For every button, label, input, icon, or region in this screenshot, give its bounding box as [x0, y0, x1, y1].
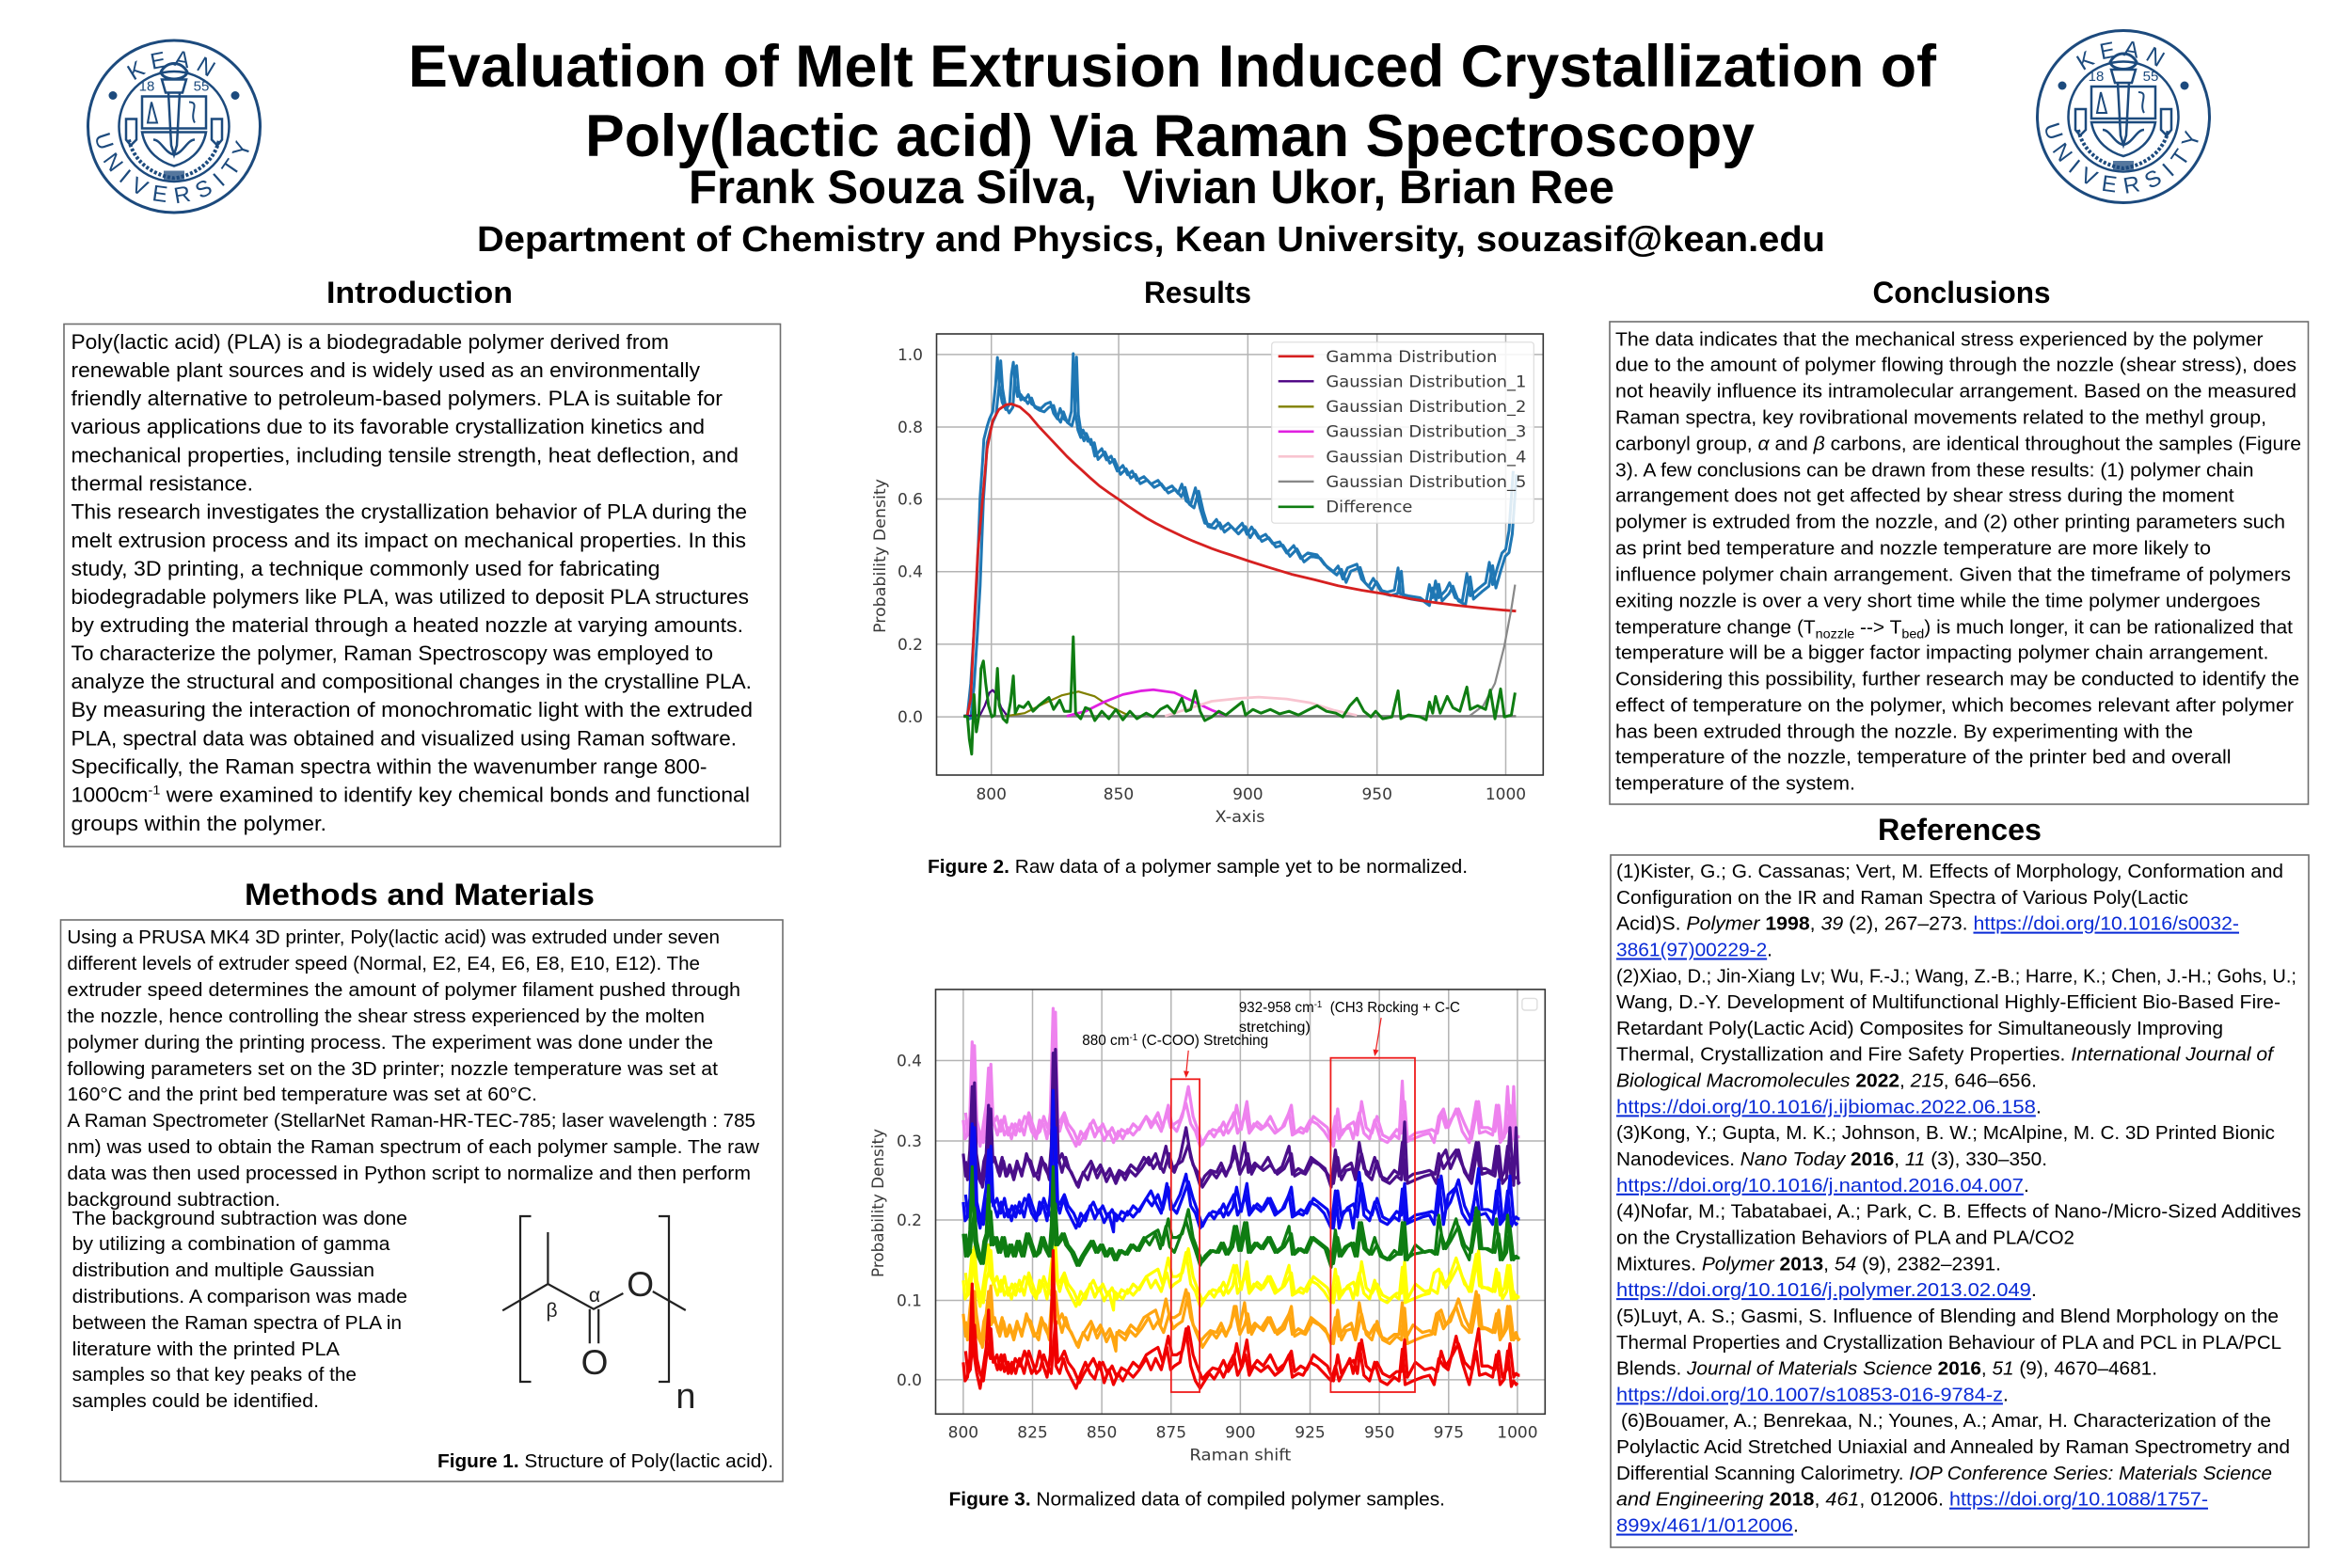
introduction text	[72, 330, 753, 835]
introduction text: friendly alternative to petroleum-based polymers. PLA is suitable for	[72, 387, 723, 410]
axis tick labels and titles: 900	[1225, 1424, 1256, 1443]
conclusions text: arrangement does not get affected by shear stress during the moment	[1615, 485, 2234, 506]
caption: figure 3: Figure 3. Normalized data of compiled polymer samples.	[948, 1490, 1445, 1511]
axis tick labels and titles: 0.8	[898, 419, 923, 437]
methods text: background subtraction.	[67, 1190, 280, 1211]
methods text: nm) was used to obtain the Raman spectrum of each polymer sample. The raw	[67, 1137, 759, 1158]
methods text beside the structure: samples could be identified.	[72, 1391, 319, 1412]
plot frame	[935, 990, 1545, 1414]
reference list: (6)Bouamer, A.; Benrekaa, N.; Younes, A.; Amar, H. Characterization of the	[1621, 1411, 2271, 1432]
conclusions text: as print bed temperature and nozzle temperature are more likely to	[1615, 538, 2211, 559]
chemical structure of PLA: n	[675, 1377, 696, 1417]
reference list: https://doi.org/10.1007/s10853-016-9784-z .	[1616, 1385, 2009, 1405]
chart: figure 3 normalized data	[869, 990, 1545, 1465]
panel: introduction	[64, 324, 781, 847]
conclusions text: due to the amount of polymer flowing through the nozzle (shear stress), does	[1615, 356, 2296, 376]
annotation: 932-958 cm-1 region	[1239, 1000, 1460, 1036]
reference list: Differential Scanning Calorimetry. IOP Conference Series: Materials Science	[1616, 1464, 2272, 1484]
axis tick labels and titles: 0.2	[898, 636, 923, 655]
reference list: Acid)S. Polymer 1998, 39 (2), 267–273. https://doi.org/10.1016/s0032-	[1616, 914, 2239, 935]
red highlight boxes and arrows	[1171, 1018, 1415, 1392]
plot area with spectra	[936, 990, 1545, 1414]
introduction text: groups within the polymer.	[72, 812, 326, 835]
introduction text: Specifically, the Raman spectra within the wavenumber range 800-	[72, 754, 707, 779]
introduction text: This research investigates the crystallization behavior of PLA during the	[72, 500, 747, 523]
introduction text: were examined to identify key chemical bonds and functional	[160, 783, 750, 807]
introduction text: To characterize the polymer, Raman Spectroscopy was employed to	[72, 641, 713, 665]
reference list: Configuration on the IR and Raman Spectra of Various Poly(Lactic	[1616, 888, 2188, 909]
reference list: https://doi.org/10.1016/j.polymer.2013.02.049 .	[1616, 1280, 2037, 1301]
logo: Kean University seal, left: KEAN	[126, 51, 216, 80]
title: Poly(lactic acid) Via Raman Spectroscopy	[585, 103, 1755, 169]
axis tick labels and titles: 1000	[1497, 1424, 1538, 1443]
methods text: different levels of extruder speed (Normal, E2, E4, E6, E8, E10, E12). The	[67, 954, 700, 974]
annotation: 932-958 cm-1 region: stretching)	[1239, 1020, 1311, 1036]
legend: Gamma Distribution	[1326, 348, 1497, 366]
reference list: Wang, D.-Y. Development of Multifunctional Highly-Efficient Bio-Based Fire-	[1616, 992, 2280, 1013]
axis tick labels and titles: 950	[1364, 1424, 1394, 1443]
conclusions text: temperature of the nozzle, temperature of the printer bed and overall	[1615, 747, 2232, 768]
methods text: data was then used processed in Python script to normalize and then perform	[67, 1164, 751, 1184]
conclusions text: influence polymer chain arrangement. Given that the timeframe of polymers	[1615, 564, 2291, 585]
chemical structure of PLA: O	[627, 1265, 654, 1304]
heading: Results: Results	[1144, 276, 1251, 309]
axis tick labels and titles	[871, 346, 1526, 827]
reference list	[1616, 862, 2301, 1537]
methods text beside the structure	[72, 1209, 407, 1412]
axis tick labels and titles: Probability Density	[871, 479, 890, 633]
conclusions text: temperature of the system.	[1615, 773, 1855, 794]
methods text beside the structure: distributions. A comparison was made	[72, 1287, 407, 1307]
methods text beside the structure: literature with the printed PLA	[72, 1339, 340, 1360]
axis tick labels and titles: 0.4	[898, 563, 923, 582]
logo: Kean University seal, left: UNIVERSITY	[96, 133, 249, 203]
conclusions text: ) is much longer, it can be rationalized that	[1924, 617, 2293, 638]
reference list: Retardant Poly(Lactic Acid) Composites for Simultaneously Improving	[1616, 1019, 2223, 1039]
legend	[1272, 342, 1534, 523]
axis tick labels and titles: 825	[1017, 1424, 1048, 1443]
axis tick labels and titles: 0.1	[897, 1292, 922, 1311]
methods text: A Raman Spectrometer (StellarNet Raman-HR-TEC-785; laser wavelength : 785	[67, 1111, 755, 1132]
reference list: on the Crystallization Behaviors of PLA and PLA/CO2	[1616, 1228, 2074, 1249]
axis tick labels and titles: Probability Density	[869, 1129, 888, 1277]
conclusions text: The data indicates that the mechanical stress experienced by the polymer	[1615, 329, 2264, 350]
axis tick labels and titles: X-axis	[1216, 808, 1265, 827]
logo: Kean University seal, right: KEAN	[2075, 41, 2166, 70]
reference list: Thermal Properties and Crystallization Behaviour of PLA and PCL in PLA/PCL	[1616, 1333, 2281, 1354]
axis tick labels and titles: 950	[1361, 785, 1392, 804]
conclusions text: 3). A few conclusions can be drawn from these results: (1) polymer chain	[1615, 461, 2254, 482]
title: Evaluation of Melt Extrusion Induced Crystallization of	[408, 34, 1937, 100]
heading: Methods and Materials: Methods and Materials	[245, 878, 595, 911]
conclusions text: nozzle	[1816, 626, 1854, 641]
legend: Difference	[1326, 499, 1412, 516]
conclusions text: carbonyl group, α and β carbons, are identical throughout the samples (Figure	[1615, 435, 2301, 455]
annotation: 932-958 cm-1 region: 932-958 cm	[1239, 1000, 1316, 1016]
axis tick labels and titles	[869, 1052, 1538, 1465]
annotation: 932-958 cm-1 region: -1	[1314, 1000, 1323, 1010]
caption: figure 1: Figure 1. Structure of Poly(lactic acid).	[437, 1451, 773, 1472]
introduction text: mechanical properties, including tensile strength, heat deflection, and	[72, 444, 739, 467]
conclusions text: temperature will be a bigger factor impacting polymer chain arrangement.	[1615, 643, 2269, 664]
reference list: (4)Nofar, M.; Tabatabaei, A.; Park, C. B. Effects of Nano-/Micro-Sized Additives	[1616, 1202, 2301, 1223]
axis tick labels and titles: 0.3	[897, 1132, 922, 1151]
introduction text: Poly(lactic acid) (PLA) is a biodegradable polymer derived from	[72, 330, 669, 354]
axis tick labels and titles: 1000	[1486, 785, 1526, 804]
methods text: 160°C and the print bed temperature was set at 60°C.	[67, 1085, 537, 1105]
axis tick labels and titles: 800	[976, 785, 1007, 804]
axis tick labels and titles: 0.0	[897, 1371, 922, 1390]
introduction text: renewable plant sources and is widely used as an environmentally	[72, 358, 701, 382]
conclusions text: exiting nozzle is over a very short time while the time polymer undergoes	[1615, 591, 2260, 611]
logo: Kean University seal, right	[2036, 29, 2211, 204]
reference list: Polylactic Acid Stretched Uniaxial and Annealed by Raman Spectrometry and	[1616, 1437, 2290, 1458]
introduction text: melt extrusion process and its impact on mechanical properties. In this	[72, 529, 746, 552]
axis tick labels and titles: 0.2	[897, 1212, 922, 1230]
axis tick labels and titles: 975	[1434, 1424, 1464, 1443]
reference list: Mixtures. Polymer 2013, 54 (9), 2382–2391.	[1616, 1254, 2001, 1275]
conclusions text: not heavily influence its intramolecular arrangement. Based on the measured	[1615, 382, 2296, 403]
introduction text: 1000cm	[72, 783, 146, 807]
chemical structure of PLA: β	[546, 1300, 558, 1322]
introduction text: By measuring the interaction of monochromatic light with the extruded	[72, 698, 753, 721]
reference list: (2)Xiao, D.; Jin-Xiang Lv; Wu, F.-J.; Wang, Z.-B.; Harre, K.; Chen, J.-H.; Gohs, U.;	[1616, 966, 2296, 987]
annotation: 932-958 cm-1 region: (CH3 Rocking + C-C	[1322, 1000, 1460, 1016]
conclusions text: Raman spectra, key rovibrational movements related to the methyl group,	[1615, 408, 2266, 429]
introduction text: -1	[149, 783, 161, 798]
logo: Kean University seal, right: 18	[2089, 69, 2104, 85]
methods text	[67, 927, 759, 1211]
axis tick labels and titles: 0.0	[898, 708, 923, 727]
methods text beside the structure: samples so that key peaks of the	[72, 1365, 357, 1386]
reference list: https://doi.org/10.1016/j.nantod.2016.04.007 .	[1616, 1176, 2029, 1196]
legend: Gaussian Distribution_4	[1326, 448, 1526, 467]
reference list: and Engineering 2018, 461, 012006. https://doi.org/10.1088/1757-	[1616, 1490, 2208, 1511]
reference list: Blends. Journal of Materials Science 2016, 51 (9), 4670–4681.	[1616, 1359, 2157, 1380]
reference list: (5)Luyt, A. S.; Gasmi, S. Influence of Blending and Blend Morphology on the	[1616, 1307, 2279, 1327]
reference list: (1)Kister, G.; G. Cassanas; Vert, M. Effects of Morphology, Conformation and	[1616, 862, 2283, 882]
logo: Kean University seal, right: 55	[2143, 69, 2158, 85]
axis tick labels and titles: 0.4	[897, 1052, 922, 1070]
axis tick labels and titles: 800	[948, 1424, 978, 1443]
conclusions text: polymer is extruded from the nozzle, and (2) other printing parameters such	[1615, 512, 2285, 532]
axis tick labels and titles: Raman shift	[1189, 1446, 1292, 1465]
panel: methods and materials	[60, 920, 783, 1481]
methods text: the nozzle, hence controlling the shear stress experienced by the molten	[67, 1006, 705, 1027]
introduction text: analyze the structural and compositional changes in the crystalline PLA.	[72, 670, 752, 693]
axis tick labels and titles: 900	[1232, 785, 1263, 804]
caption: figure 2: Figure 2. Raw data of a polymer sample yet to be normalized.	[928, 857, 1468, 878]
conclusions text: temperature change (T	[1615, 617, 1810, 638]
annotation: 880 cm-1 peak: (C-COO) Stretching	[1137, 1033, 1268, 1049]
reference list: Biological Macromolecules 2022, 215, 646–656.	[1616, 1071, 2037, 1092]
annotation: 880 cm-1 peak: 880 cm	[1082, 1033, 1130, 1049]
logo: Kean University seal, left: 18	[139, 79, 154, 94]
chart: figure 2 raw data	[871, 334, 1543, 827]
introduction text: biodegradable polymers like PLA, was utilized to deposit PLA structures	[72, 585, 749, 609]
heading: Introduction: Introduction	[326, 276, 513, 309]
plot area with curves	[937, 334, 1543, 775]
logo: Kean University seal, left	[87, 40, 262, 214]
axis tick labels and titles: 850	[1104, 785, 1134, 804]
introduction text: by extruding the material through a heated nozzle at varying amounts.	[72, 613, 743, 637]
chemical structure of PLA	[502, 1216, 696, 1417]
introduction text: study, 3D printing, a technique commonly used for fabricating	[72, 557, 660, 580]
legend: Gaussian Distribution_3	[1326, 423, 1526, 442]
chemical structure of PLA: α	[589, 1285, 600, 1307]
methods text beside the structure: between the Raman spectra of PLA in	[72, 1313, 402, 1334]
reference list: (3)Kong, Y.; Gupta, M. K.; Johnson, B. W.; McAlpine, M. C. 3D Printed Bionic	[1616, 1123, 2275, 1144]
legend: Gaussian Distribution_1	[1326, 373, 1526, 392]
empty legend box	[1522, 998, 1537, 1010]
axis tick labels and titles: 925	[1295, 1424, 1326, 1443]
introduction text: PLA, spectral data was obtained and visualized using Raman software.	[72, 726, 737, 751]
methods text: extruder speed determines the amount of polymer filament pushed through	[67, 980, 740, 1001]
reference list: Thermal, Crystallization and Fire Safety Properties. International Journal of	[1616, 1045, 2275, 1066]
reference list: 3861(97)00229-2.	[1616, 941, 1772, 961]
panel: references	[1611, 855, 2309, 1547]
conclusions text: effect of temperature on the polymer, which becomes relevant after polymer	[1615, 696, 2294, 717]
introduction text: thermal resistance.	[72, 472, 253, 495]
conclusions text: has been extruded through the nozzle. By experimenting with the	[1615, 722, 2193, 743]
conclusions text: bed	[1901, 626, 1924, 641]
conclusions text: --> T	[1854, 617, 1901, 638]
logo: Kean University seal, left: 55	[194, 79, 209, 94]
methods text beside the structure: distribution and multiple Gaussian	[72, 1260, 374, 1281]
annotation: 880 cm-1 peak: -1	[1129, 1033, 1138, 1043]
chemical structure of PLA: O	[581, 1343, 608, 1382]
affiliation: Department of Chemistry and Physics, Kean University, souzasif@kean.edu	[477, 220, 1825, 260]
axis tick labels and titles: 1.0	[898, 346, 923, 365]
heading: Conclusions: Conclusions	[1872, 276, 2051, 309]
heading: References: References	[1878, 813, 2042, 847]
conclusions text	[1615, 329, 2301, 794]
methods text beside the structure: by utilizing a combination of gamma	[72, 1234, 390, 1255]
reference list: https://doi.org/10.1016/j.ijbiomac.2022.06.158 .	[1616, 1097, 2042, 1117]
authors: Frank Souza Silva, Vivian Ukor, Brian Ree	[689, 161, 1614, 214]
introduction text: various applications due to its favorable crystallization kinetics and	[72, 415, 705, 438]
methods text: polymer during the printing process. The experiment was done under the	[67, 1033, 713, 1053]
axis tick labels and titles: 875	[1156, 1424, 1186, 1443]
reference list: Nanodevices. Nano Today 2016, 11 (3), 330–350.	[1616, 1149, 2047, 1170]
legend: Gaussian Distribution_5	[1326, 473, 1526, 492]
logo: Kean University seal, right: UNIVERSITY	[2045, 122, 2199, 194]
axis tick labels and titles: 0.6	[898, 491, 923, 510]
legend: Gaussian Distribution_2	[1326, 398, 1526, 417]
reference list: 899x/461/1/012006 .	[1616, 1516, 1799, 1537]
panel: conclusions	[1610, 322, 2309, 804]
axis tick labels and titles: 850	[1087, 1424, 1117, 1443]
methods text: following parameters set on the 3D printer; nozzle temperature was set at	[67, 1059, 718, 1080]
methods text beside the structure: The background subtraction was done	[72, 1209, 407, 1229]
title	[408, 34, 1937, 169]
conclusions text: Considering this possibility, further research may be conducted to identify the	[1615, 670, 2299, 690]
methods text: Using a PRUSA MK4 3D printer, Poly(lactic acid) was extruded under seven	[67, 927, 720, 948]
plot frame	[937, 334, 1543, 775]
